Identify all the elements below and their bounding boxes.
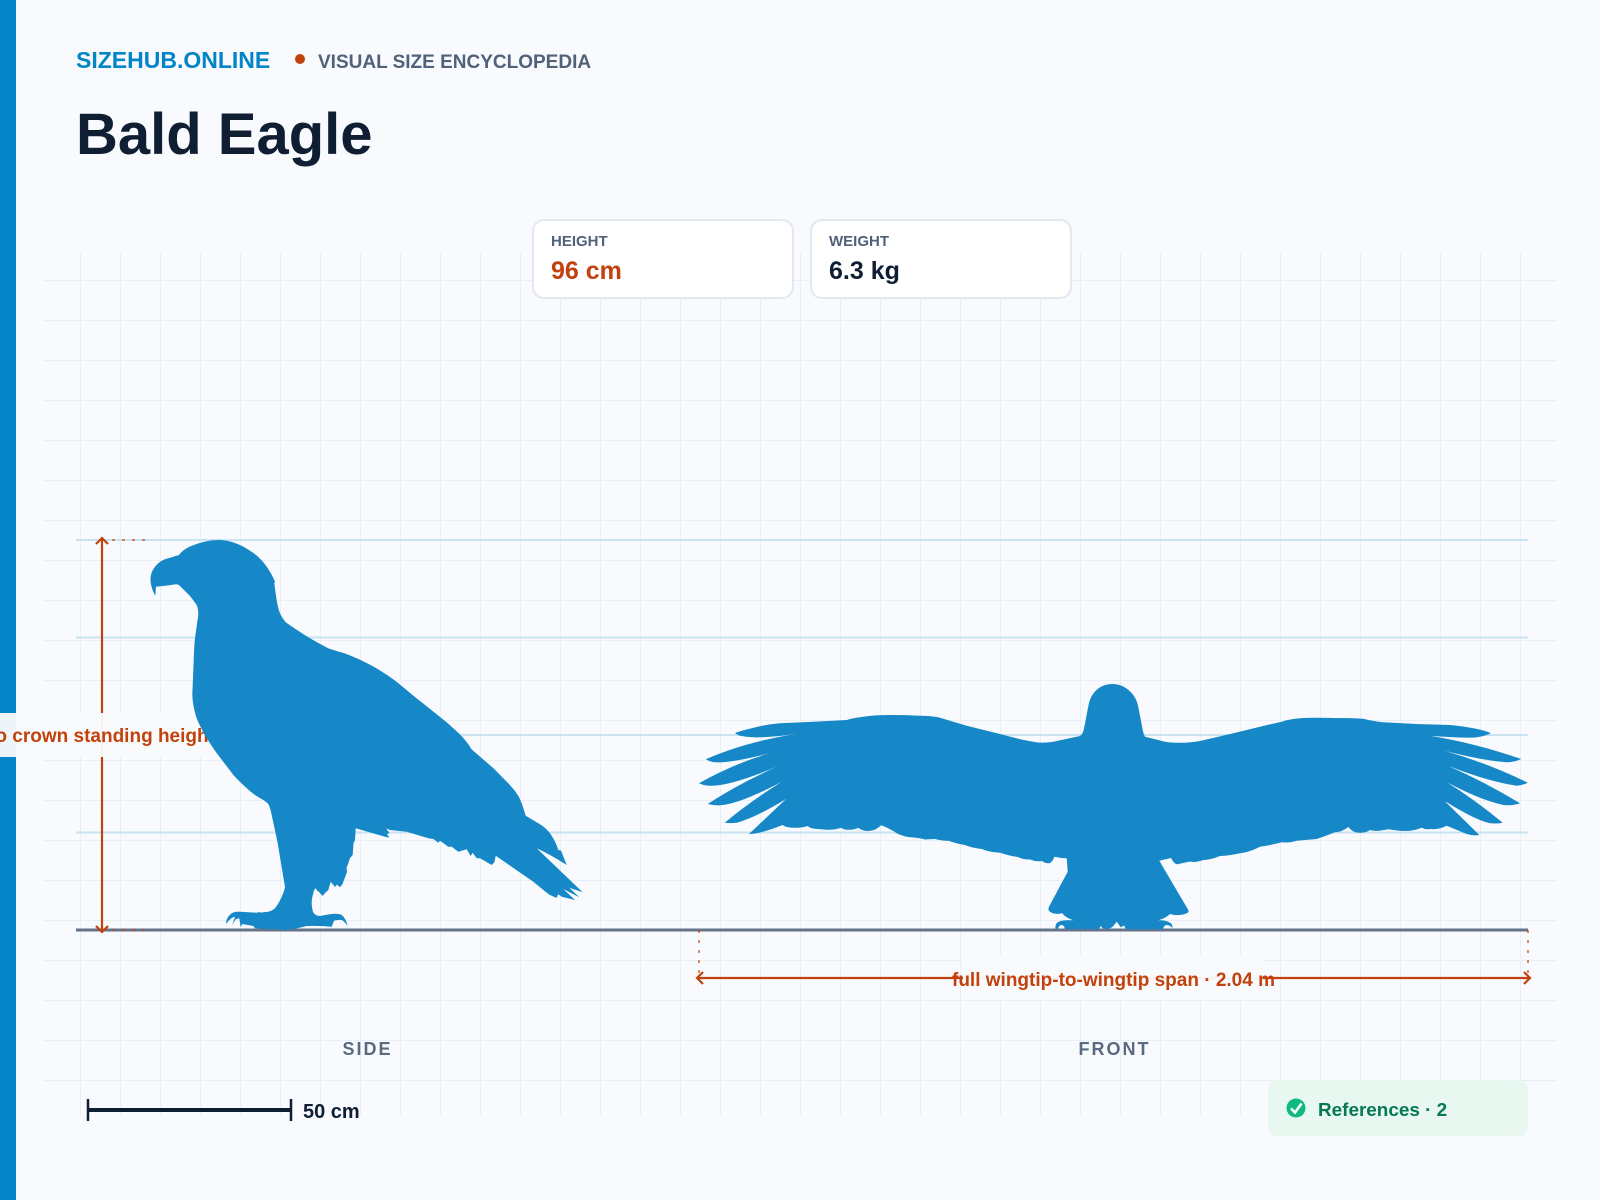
wingspan dimension bbox=[697, 930, 1530, 1000]
accent bar bbox=[0, 0, 16, 1200]
references badge: References · 2 bbox=[1318, 1100, 1447, 1121]
silhouette: side view bbox=[150, 540, 583, 930]
height reference guides bbox=[76, 539, 1528, 834]
view label: side: SIDE bbox=[342, 1039, 393, 1059]
height dimension bbox=[0, 538, 216, 932]
wingspan label bbox=[952, 956, 1275, 1000]
wingspan label: full wingtip-to-wingtip span · 2.04 m bbox=[952, 970, 1275, 991]
height label bbox=[0, 713, 216, 757]
title: Bald Eagle bbox=[76, 102, 373, 167]
stat card: height bbox=[533, 220, 793, 298]
header bbox=[76, 47, 591, 73]
brand name: SIZEHUB.ONLINE bbox=[76, 47, 270, 73]
stat card: weight bbox=[811, 220, 1071, 298]
ground line bbox=[76, 928, 1528, 932]
silhouette: front view bbox=[699, 684, 1528, 929]
view label: front: FRONT bbox=[1078, 1039, 1150, 1059]
tagline: VISUAL SIZE ENCYCLOPEDIA bbox=[318, 52, 591, 73]
stat card: height: HEIGHT bbox=[551, 233, 608, 250]
brand dot bbox=[295, 54, 305, 64]
scale bar: 50 cm bbox=[303, 1101, 360, 1123]
stat card: height: 96 cm bbox=[551, 257, 622, 285]
icon: check bbox=[1286, 1098, 1306, 1118]
references badge bbox=[1268, 1080, 1528, 1136]
scale bar bbox=[88, 1099, 360, 1123]
stat card: weight: WEIGHT bbox=[829, 233, 889, 250]
stat card: weight: 6.3 kg bbox=[829, 257, 900, 285]
